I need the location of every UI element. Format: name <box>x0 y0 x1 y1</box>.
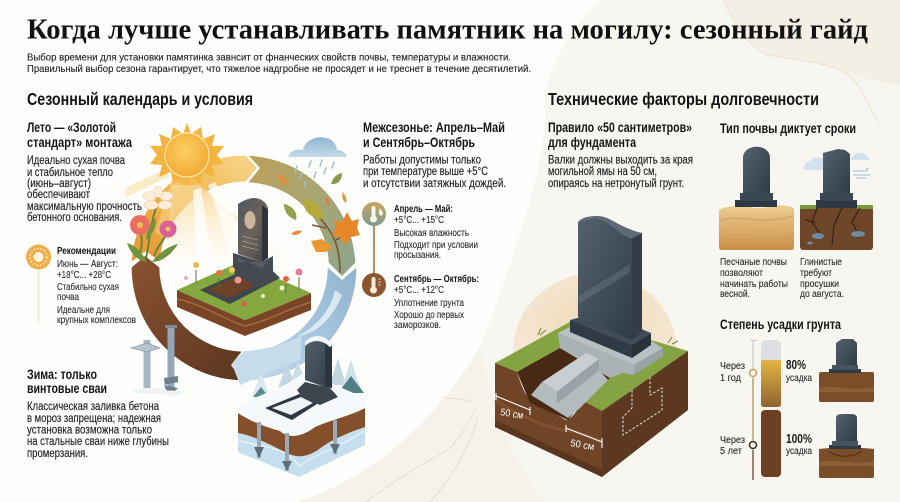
recommendations text: Июнь — Август: <box>57 259 118 270</box>
winter heading: винтовые сваи <box>27 381 107 396</box>
off-season description <box>363 154 506 190</box>
sun rays <box>125 170 282 262</box>
intro text: Правильный выбор сезона гарантирует, что тяжелое надгробне не просядет и не треснет в течение десятилетий. <box>27 63 531 75</box>
autumn text: Хорошо до первых <box>394 310 464 321</box>
summer heading: Лето — «Золотой <box>27 120 116 135</box>
summer description: максимальную прочность <box>27 201 142 213</box>
shrinkage values: 80% <box>786 358 806 372</box>
summer description: Идеально сухая почва <box>27 155 125 167</box>
seasonal cycle diagram <box>125 123 365 477</box>
clay soil caption: просушки <box>800 279 839 290</box>
spring text: Подходит при условии <box>394 240 478 251</box>
rule description: могильной ямы на 50 см, <box>548 166 657 178</box>
rule description: Валки должны выходить за края <box>548 154 693 166</box>
autumn text <box>394 273 479 331</box>
panel: shrinkage <box>720 317 874 480</box>
panel: winter <box>27 367 169 460</box>
shrinkage heading: Степень усадки грунта <box>720 317 841 332</box>
autumn text: заморозков. <box>394 320 441 331</box>
dimension: right 50 cm: 50 см <box>569 438 595 453</box>
sandy soil caption: весной. <box>720 289 750 300</box>
timeline connector <box>373 224 375 276</box>
autumn text: Сентябрь — Октябрь: <box>394 273 479 285</box>
recommendations text: Рекомендации <box>57 246 116 257</box>
heading: seasonal calendar: Сезонный календарь и условия <box>27 89 253 109</box>
clay soil caption <box>800 257 844 300</box>
spring text <box>394 204 478 261</box>
icon: sandy soil <box>719 147 794 250</box>
summer heading: стандарт» монтажа <box>27 135 132 150</box>
dimension: right 50 cm <box>566 425 602 453</box>
icon: summer flowers <box>127 186 178 262</box>
icon: autumn branch <box>277 173 360 273</box>
dimension: left 50 cm <box>496 393 530 422</box>
shrinkage values <box>786 358 812 457</box>
off-season heading: Межсезонье: Апрель–Май <box>363 120 505 135</box>
off-season description: и отсутствии затяжных дождей. <box>363 178 506 190</box>
icon: recommendations sun <box>26 244 51 323</box>
autumn text: Уплотнение грунта <box>394 298 464 309</box>
dimension: left 50 cm: 50 см <box>499 407 524 422</box>
autumn text: +5°C... +12°C <box>394 285 444 296</box>
summer description: обеспечивают <box>27 189 91 201</box>
shrinkage labels: 5 лет <box>720 446 742 457</box>
intro text <box>27 52 531 75</box>
arrow: summer arc <box>131 155 258 263</box>
recommendations text: крупных комплексов <box>57 315 136 326</box>
off-season description: при температуре выше +5°C <box>363 166 488 178</box>
spring text: +5°C... +15°C <box>394 215 444 226</box>
winter description: установка возможна только <box>27 424 152 436</box>
foundation illustration <box>495 216 688 477</box>
panel: 50 cm rule <box>495 120 693 477</box>
icon: steel piles <box>131 325 183 396</box>
spring text: просызания. <box>394 250 441 261</box>
arrow: winter arc <box>232 266 357 381</box>
intro text: Выбор времени для установки памятинка завнсит от фнанческих свойств почвы, температуры и влажности. <box>27 52 511 64</box>
spring text: Апрель — Май: <box>394 204 453 215</box>
sandy soil caption <box>720 257 788 300</box>
winter heading <box>27 367 107 396</box>
soil heading: Тип почвы диктует сроки <box>720 121 856 136</box>
shrinkage labels: 1 год <box>720 373 741 384</box>
sandy soil caption: начинать работы <box>720 278 788 290</box>
summer description <box>27 155 142 224</box>
summer description: (июнь–август) <box>27 178 91 190</box>
summer heading <box>27 120 132 150</box>
arrow: spring soil arc <box>131 255 243 381</box>
panel: off-season <box>362 120 506 331</box>
shrinkage labels: Через <box>720 361 745 372</box>
rule heading: для фундамента <box>548 135 636 150</box>
heading: technical factors: Технические факторы долговечности <box>548 89 819 109</box>
shrinkage values: усадка <box>786 446 812 457</box>
recommendations text: Стабильно сухая <box>57 281 119 293</box>
off-season heading <box>363 120 505 150</box>
winter heading: Зима: только <box>27 367 97 382</box>
icon: spring thermometer <box>362 202 386 226</box>
clay soil caption: требуют <box>800 267 832 279</box>
icon: soil after five years <box>819 414 874 478</box>
shrinkage labels: Через <box>720 435 745 446</box>
shrinkage values: усадка <box>786 373 812 384</box>
recommendations text: почва <box>57 292 79 303</box>
icon: autumn thermometer <box>362 273 386 297</box>
rule description <box>548 154 693 190</box>
sandy soil caption: позволяют <box>720 268 763 279</box>
off-season heading: и Сентябрь–Октябрь <box>363 135 475 150</box>
clay soil caption: до августа. <box>800 289 844 300</box>
title: Когда лучше устанавливать памятник на могилу: сезонный гайд <box>27 14 868 46</box>
rule description: опираясь на нетронутый грунт. <box>548 178 684 190</box>
panel: soil type <box>719 121 873 300</box>
panel: summer <box>26 120 142 326</box>
icon: winter scene <box>232 335 365 477</box>
recommendations text: Идеальне для <box>57 305 110 316</box>
icon: sun <box>150 123 224 187</box>
spring text: Высокая влажность <box>394 228 469 239</box>
recommendations text: +18°C... +28°C <box>57 270 111 281</box>
shrinkage column chart <box>750 340 781 480</box>
icon: clay soil <box>800 149 873 250</box>
icon: soil after one year <box>819 339 874 402</box>
winter description: промерзания. <box>27 448 88 460</box>
icon: central summer grave <box>177 198 311 336</box>
winter description: на стальные сваи ниже глубины <box>27 436 169 448</box>
winter description: в мороз запрещена; надежная <box>27 413 161 425</box>
clay soil caption: Глинистые <box>800 257 842 268</box>
icon: rain cloud <box>288 137 347 187</box>
arrow: autumn arc <box>247 155 356 277</box>
summer description: и стабильное тепло <box>27 167 113 179</box>
recommendations text <box>57 246 136 326</box>
winter description <box>27 401 169 460</box>
shrinkage values: 100% <box>786 432 812 446</box>
rule heading <box>548 120 692 150</box>
shrinkage labels <box>720 361 745 457</box>
sandy soil caption: Песчаные почвы <box>720 257 787 268</box>
summer description: бетонного основания. <box>27 212 122 224</box>
winter description: Классическая заливка бетона <box>27 401 159 413</box>
rule heading: Правило «50 сантиметров» <box>548 120 692 135</box>
off-season description: Работы допустимы только <box>363 154 481 166</box>
